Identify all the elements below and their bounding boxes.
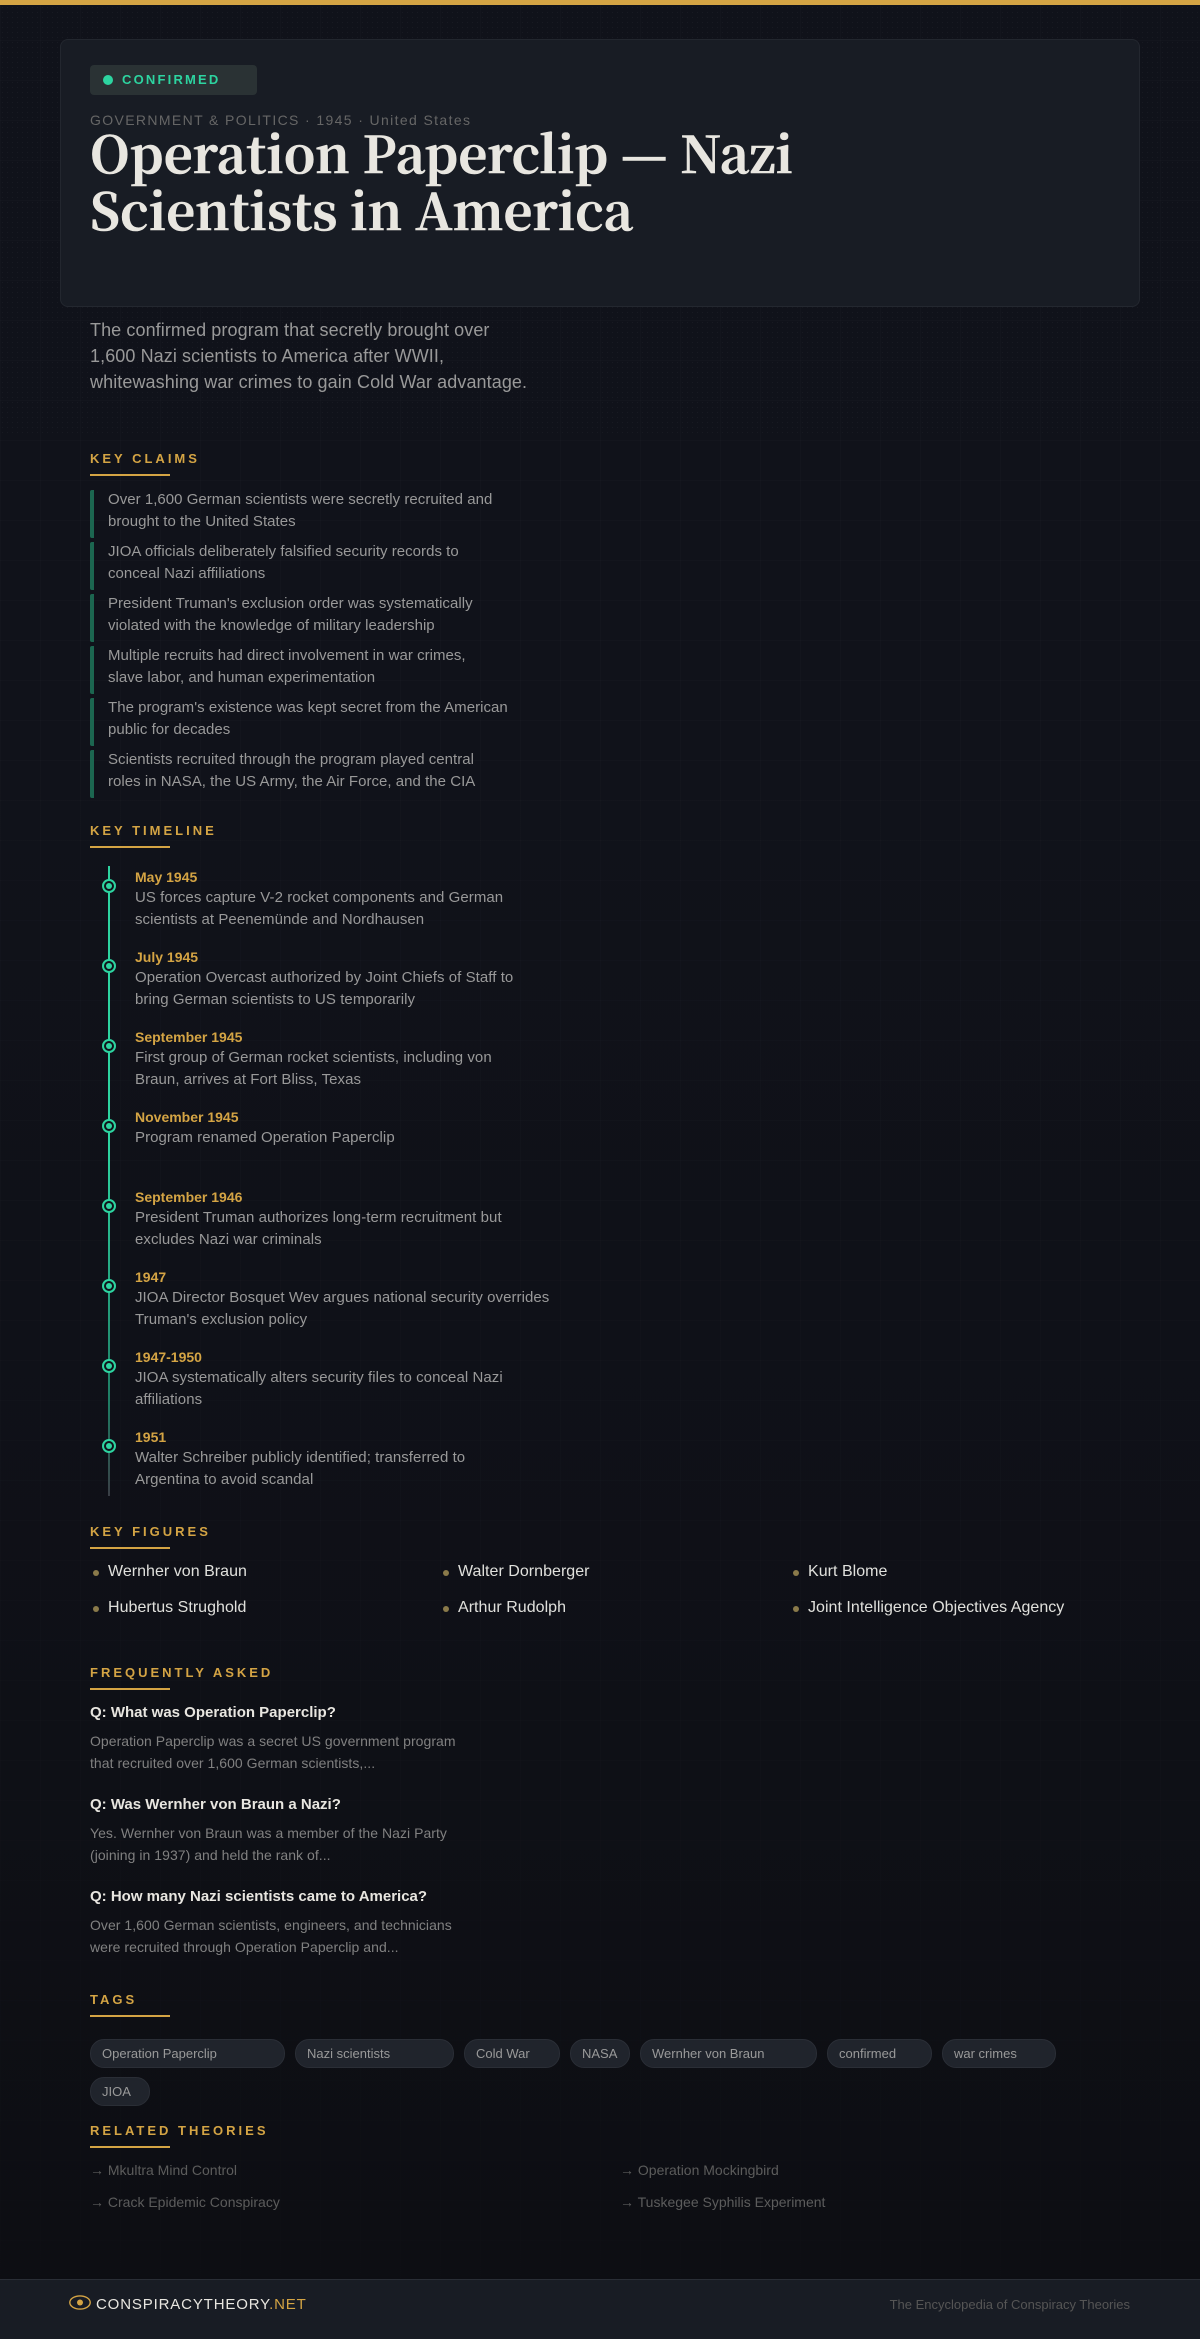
event: November 1945: November 1945	[135, 1109, 239, 1125]
link: Tuskegee Syphilis Experiment: → Tuskegee Syphilis Experiment	[620, 2194, 825, 2210]
figure: Arthur Rudolph: Arthur Rudolph	[458, 1599, 566, 1616]
title: Operation Paperclip — Nazi	[90, 116, 793, 188]
claim 4	[90, 646, 630, 694]
claim 6: roles in NASA, the US Army, the Air Force, and the CIA	[108, 773, 475, 790]
claim 4: Multiple recruits had direct involvement in war crimes,	[108, 647, 466, 664]
heading: key figures: KEY FIGURES	[90, 1524, 211, 1539]
heading: frequently asked: FREQUENTLY ASKED	[90, 1665, 273, 1680]
site wordmark: CONSPIRACYTHEORY.NET	[96, 2296, 307, 2313]
event: May 1945: scientists at Peenemünde and Nordhausen	[135, 911, 424, 928]
heading: key claims: KEY CLAIMS	[90, 451, 200, 466]
event: 1947-1950	[102, 1349, 503, 1408]
panel: key figures list	[93, 1563, 1064, 1616]
FAQ item 2: Yes. Wernher von Braun was a member of the Nazi Party	[90, 1825, 447, 1841]
link: Crack Epidemic Conspiracy: → Crack Epidemic Conspiracy	[90, 2194, 280, 2210]
icon: status dot	[103, 75, 113, 85]
claim 4: slave labor, and human experimentation	[108, 669, 375, 686]
event: May 1945: US forces capture V-2 rocket components and German	[135, 889, 503, 906]
heading: related theories: RELATED THEORIES	[90, 2123, 268, 2138]
FAQ item 2: (joining in 1937) and held the rank of...	[90, 1847, 331, 1863]
figure: Joint Intelligence Objectives Agency: Joint Intelligence Objectives Agency	[808, 1599, 1064, 1616]
tag: confirmed: confirmed	[839, 2046, 896, 2061]
figure: Walter Dornberger: Walter Dornberger	[458, 1563, 590, 1580]
event: May 1945	[102, 869, 503, 928]
tag: Nazi scientists: Nazi scientists	[307, 2046, 390, 2061]
FAQ item 3: Over 1,600 German scientists, engineers, and technicians	[90, 1917, 452, 1933]
claim 6	[90, 750, 630, 798]
event: May 1945: May 1945	[135, 869, 197, 885]
event: September 1946: President Truman authorizes long-term recruitment but	[135, 1209, 502, 1226]
FAQ item 1: Operation Paperclip was a secret US government program	[90, 1733, 456, 1749]
footer tagline: The Encyclopedia of Conspiracy Theories	[890, 2297, 1130, 2312]
FAQ item 2: Q: Was Wernher von Braun a Nazi?	[90, 1796, 341, 1813]
panel: FAQ	[90, 1704, 456, 1955]
badge label: CONFIRMED	[122, 72, 221, 87]
panel: tags	[90, 2039, 1056, 2106]
timeline spine	[108, 866, 110, 1496]
FAQ item 3	[90, 1888, 452, 1955]
claim 3	[90, 594, 630, 642]
claim 1	[90, 490, 630, 538]
event: July 1945	[102, 949, 513, 1008]
tag: Wernher von Braun	[640, 2039, 817, 2068]
claim 2: JIOA officials deliberately falsified security records to	[108, 543, 459, 560]
tag: Cold War: Cold War	[476, 2046, 530, 2061]
tag: war crimes: war crimes	[954, 2046, 1017, 2061]
event: July 1945: Operation Overcast authorized by Joint Chiefs of Staff to	[135, 969, 513, 986]
event: 1947-1950: JIOA systematically alters security files to conceal Nazi	[135, 1369, 503, 1386]
figure: Wernher von Braun: Wernher von Braun	[108, 1563, 247, 1580]
event: November 1945	[102, 1109, 395, 1146]
claim 5: The program's existence was kept secret from the American	[108, 699, 508, 716]
tag: war crimes	[942, 2039, 1056, 2068]
event: September 1945: Braun, arrives at Fort Bliss, Texas	[135, 1071, 361, 1088]
FAQ item 1	[90, 1704, 456, 1771]
panel: related theories links	[90, 2162, 826, 2210]
panel: key claims list	[90, 490, 508, 798]
tag: NASA: NASA	[582, 2046, 617, 2061]
event: 1951: 1951	[135, 1429, 166, 1445]
subtitle: The confirmed program that secretly brought over	[90, 320, 490, 340]
claim 3: violated with the knowledge of military leadership	[108, 617, 435, 634]
event: September 1946: excludes Nazi war criminals	[135, 1231, 322, 1248]
event: 1947-1950: affiliations	[135, 1391, 202, 1408]
footer bar	[0, 2279, 1200, 2339]
tag: confirmed	[827, 2039, 932, 2068]
claim 6: Scientists recruited through the program played central	[108, 751, 474, 768]
event: November 1945: Program renamed Operation Paperclip	[135, 1129, 395, 1146]
subtitle	[90, 320, 527, 392]
title	[90, 116, 793, 245]
event: 1947: Truman's exclusion policy	[135, 1311, 307, 1328]
event: July 1945: July 1945	[135, 949, 198, 965]
event: September 1946: September 1946	[135, 1189, 242, 1205]
claim 2: conceal Nazi affiliations	[108, 565, 265, 582]
event: 1947-1950: 1947-1950	[135, 1349, 202, 1365]
event: 1951: Argentina to avoid scandal	[135, 1471, 313, 1488]
FAQ item 1: that recruited over 1,600 German scientists,...	[90, 1755, 375, 1771]
tag: Operation Paperclip	[90, 2039, 285, 2068]
figure: Kurt Blome: Kurt Blome	[808, 1563, 887, 1580]
top accent bar	[0, 0, 1200, 5]
tag: JIOA: JIOA	[102, 2084, 131, 2099]
subtitle: whitewashing war crimes to gain Cold War advantage.	[90, 372, 527, 392]
event: 1951: Walter Schreiber publicly identified; transferred to	[135, 1449, 465, 1466]
claim 1: Over 1,600 German scientists were secretly recruited and	[108, 491, 492, 508]
event: September 1945	[102, 1029, 492, 1088]
panel: hero header	[60, 39, 1140, 307]
figure: Hubertus Strughold: Hubertus Strughold	[108, 1599, 246, 1616]
FAQ item 3: were recruited through Operation Paperclip and...	[90, 1939, 399, 1955]
category meta line: GOVERNMENT & POLITICS · 1945 · United States	[90, 112, 471, 128]
tag: Cold War	[464, 2039, 560, 2068]
event: July 1945: bring German scientists to US temporarily	[135, 991, 415, 1008]
tag: Operation Paperclip: Operation Paperclip	[102, 2046, 217, 2061]
tag: JIOA	[90, 2077, 150, 2106]
subtitle: 1,600 Nazi scientists to America after WWII,	[90, 346, 444, 366]
heading: key timeline: KEY TIMELINE	[90, 823, 217, 838]
event: 1947: JIOA Director Bosquet Wev argues national security overrides	[135, 1289, 549, 1306]
status badge: confirmed	[90, 65, 257, 95]
claim 2	[90, 542, 630, 590]
FAQ item 2	[90, 1796, 447, 1863]
event: September 1946	[102, 1189, 502, 1248]
link: Operation Mockingbird: → Operation Mockingbird	[620, 2162, 779, 2178]
event: 1947	[102, 1269, 549, 1328]
chart: vertical timeline	[102, 866, 549, 1496]
icon: eye logo	[69, 2295, 91, 2310]
claim 5	[90, 698, 630, 746]
event: September 1945: September 1945	[135, 1029, 242, 1045]
tag: Nazi scientists	[295, 2039, 454, 2068]
title: Scientists in America	[90, 173, 633, 245]
FAQ item 1: Q: What was Operation Paperclip?	[90, 1704, 336, 1721]
tag: NASA	[570, 2039, 630, 2068]
event: September 1945: First group of German rocket scientists, including von	[135, 1049, 492, 1066]
link: Mkultra Mind Control: → Mkultra Mind Control	[90, 2162, 237, 2178]
heading: tags: TAGS	[90, 1992, 137, 2007]
claim 3: President Truman's exclusion order was systematically	[108, 595, 473, 612]
claim 5: public for decades	[108, 721, 230, 738]
event: 1947: 1947	[135, 1269, 166, 1285]
tag: Wernher von Braun: Wernher von Braun	[652, 2046, 764, 2061]
FAQ item 3: Q: How many Nazi scientists came to America?	[90, 1888, 427, 1905]
event: 1951	[102, 1429, 465, 1488]
claim 1: brought to the United States	[108, 513, 296, 530]
